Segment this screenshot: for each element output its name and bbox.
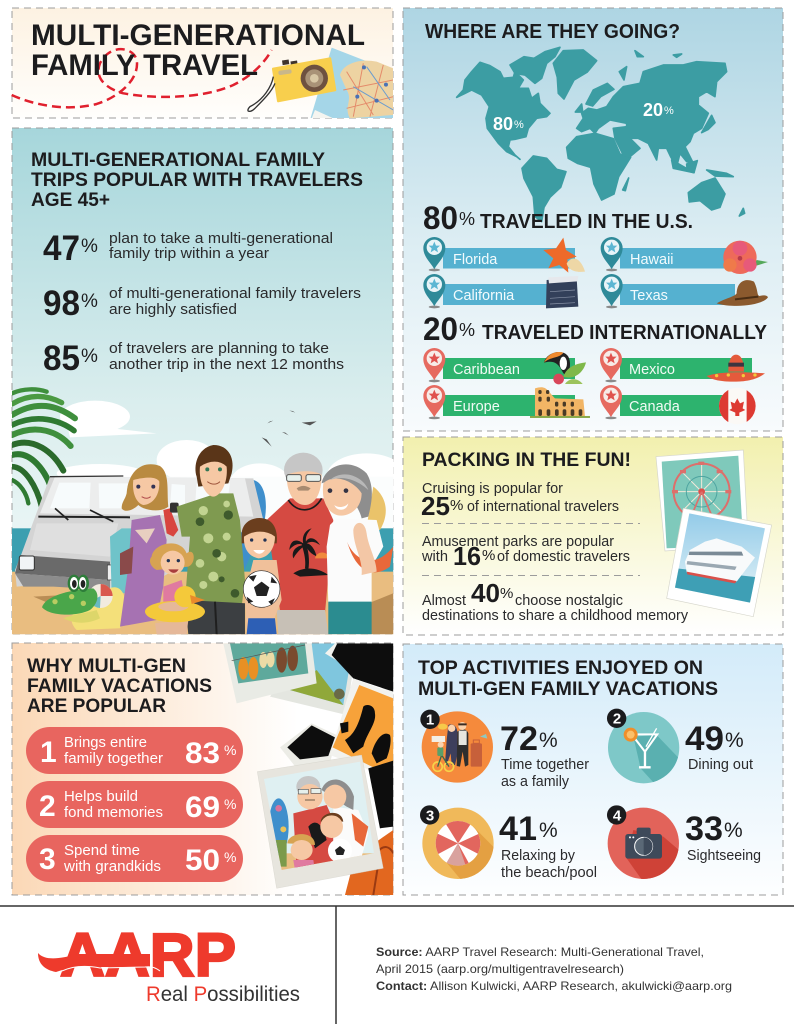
panel: multi-generational trips popular — [12, 128, 407, 635]
stat: 47% — [43, 229, 333, 268]
badge numbers: 4 — [613, 808, 622, 824]
U.S. destinations: Florida — [453, 252, 498, 268]
activity 3: 41%: the beach/pool — [501, 865, 597, 881]
U.S. destinations: Hawaii — [630, 252, 674, 268]
heading: 20% traveled internationally — [423, 311, 768, 347]
stat: amusement parks: of domestic travelers — [497, 549, 630, 565]
activity 2: 49%: % — [725, 729, 744, 752]
reason 1: Brings entire — [64, 735, 147, 751]
activity 3: 41% — [499, 810, 597, 881]
heading: WHERE ARE THEY GOING? — [425, 21, 680, 43]
activity 3: 41%: Relaxing by — [501, 848, 576, 864]
stat: cruising — [421, 481, 619, 521]
heading: AGE 45+ — [31, 190, 110, 211]
heading: MULTI-GENERATIONAL — [31, 19, 365, 52]
world map — [457, 47, 745, 222]
U.S. destinations: California — [453, 288, 515, 304]
source and contact: Source: AARP Travel Research: Multi-Generational Travel, — [376, 945, 704, 959]
reason 2: Helps build — [64, 789, 138, 805]
stat: 98%: are highly satisfied — [109, 302, 237, 318]
panel: why multi-gen family vacations are popular — [12, 643, 393, 895]
stat: nostalgic: 40 — [471, 578, 500, 608]
map labels — [493, 100, 674, 134]
source and contact: April 2015 (aarp.org/multigentravelresearch) — [376, 962, 624, 976]
stat: nostalgic — [422, 578, 689, 624]
stat: 85% — [43, 339, 344, 378]
reason 3: % — [224, 849, 236, 865]
stat: 47%: % — [81, 236, 98, 257]
stat: 85%: of travelers are planning to take — [109, 341, 329, 357]
heading: 20% traveled internationally: % — [459, 320, 475, 340]
scattered photos — [223, 643, 393, 895]
stat: nostalgic: destinations to share a childhood memory — [422, 608, 689, 624]
activity 3: 41%: 41 — [499, 810, 537, 848]
panel: where are they going — [403, 8, 783, 431]
activity 3: 41%: % — [539, 819, 558, 842]
reason 3: Spend time — [64, 843, 140, 859]
stat: 98%: % — [81, 291, 98, 312]
activity 1: 72%: % — [539, 729, 558, 752]
badge numbers: 1 — [426, 712, 434, 728]
activity 2: 49% — [685, 720, 753, 773]
stat: 98%: 98 — [43, 284, 80, 323]
map labels: % — [664, 105, 674, 117]
photos: ferris wheel and cruise ship — [656, 450, 773, 617]
stat: amusement parks: with — [421, 549, 448, 565]
pins and icons: international — [423, 348, 765, 425]
reason 2: % — [224, 796, 236, 812]
panel: title — [12, 8, 393, 120]
heading: FAMILY TRAVEL — [31, 49, 258, 82]
heading: 80% traveled in the U.S.: 80 — [423, 200, 458, 236]
panel: top activities — [403, 644, 783, 895]
tagline: Real Possibilities — [146, 983, 300, 1006]
reason 2: 69 — [185, 791, 220, 824]
U.S. destinations: Texas — [630, 288, 668, 304]
stat: 85%: % — [81, 346, 98, 367]
stat: 98% — [43, 284, 361, 323]
reason 2: fond memories — [64, 805, 163, 821]
heading: 20% traveled internationally: TRAVELED INTERNATIONALLY — [482, 322, 768, 344]
stat: nostalgic: % — [500, 585, 513, 602]
international destinations: Europe — [453, 399, 500, 415]
reason 1: 83 — [185, 737, 220, 770]
activity 1: 72% — [500, 720, 589, 790]
stat: 47%: 47 — [43, 229, 80, 268]
heading: MULTI-GEN FAMILY VACATIONS — [418, 679, 718, 700]
reason 1: family together — [64, 751, 163, 767]
AARP logo — [38, 921, 300, 1006]
badge numbers: 2 — [613, 710, 621, 728]
activity 4: 33% — [685, 810, 761, 864]
illustration: family at the beach — [12, 389, 407, 635]
badge numbers — [426, 710, 622, 824]
badge numbers: 3 — [426, 808, 434, 824]
activity 4: 33%: 33 — [685, 810, 723, 848]
stat: amusement parks: 16 — [453, 541, 481, 571]
reason 3: 50 — [185, 844, 220, 877]
reason 3: 3 — [39, 843, 56, 876]
heading: WHY MULTI-GEN — [27, 656, 186, 677]
activity 4: 33%: % — [724, 819, 743, 842]
heading: 80% traveled in the U.S.: % — [459, 209, 475, 229]
reason 2 — [26, 781, 243, 828]
dashed route — [12, 49, 272, 107]
reason 3 — [26, 835, 243, 882]
stat: cruising: Cruising is popular for — [422, 481, 563, 497]
international destinations: Mexico — [629, 362, 675, 378]
stat: nostalgic: choose nostalgic — [515, 593, 623, 609]
heading: PACKING IN THE FUN! — [422, 449, 631, 471]
reason 1 — [26, 727, 243, 774]
U.S. destinations — [423, 237, 768, 308]
stat: amusement parks: Amusement parks are popular — [422, 534, 614, 550]
international destinations: Canada — [629, 399, 681, 415]
stat: cruising: % — [450, 497, 463, 514]
stat: 85%: another trip in the next 12 months — [109, 357, 344, 373]
illustration: map and camera — [248, 48, 393, 120]
activity 1: 72%: Time together — [501, 757, 589, 773]
stat: cruising: of international travelers — [467, 499, 619, 515]
heading: 80% traveled in the U.S. — [423, 200, 693, 236]
stat: 85%: 85 — [43, 339, 80, 378]
AARP logo: AARP — [60, 921, 236, 989]
stat: nostalgic: Almost — [422, 593, 466, 609]
map labels: % — [514, 119, 524, 131]
heading: FAMILY VACATIONS — [27, 676, 212, 697]
map labels: 80 — [493, 114, 513, 134]
source and contact: Contact: Allison Kulwicki, AARP Research, akulwicki@aarp.org — [376, 979, 732, 993]
map labels: 20 — [643, 100, 663, 120]
panel: packing in the fun — [403, 437, 783, 635]
stat: amusement parks — [421, 534, 630, 571]
stat: cruising: 25 — [421, 491, 450, 521]
heading: 80% traveled in the U.S.: TRAVELED IN THE U.S. — [480, 211, 693, 233]
activity icons — [420, 709, 693, 887]
reason 3: with grandkids — [63, 859, 161, 875]
reason 2: 2 — [39, 790, 56, 823]
stat: 47%: family trip within a year — [109, 246, 269, 262]
international destinations: Caribbean — [453, 362, 520, 378]
stat: 98%: of multi-generational family travelers — [109, 286, 361, 302]
activity 4: 33%: Sightseeing — [687, 848, 761, 864]
activity 1: 72%: as a family — [501, 774, 570, 790]
heading: TRIPS POPULAR WITH TRAVELERS — [31, 170, 363, 191]
heading: TOP ACTIVITIES ENJOYED ON — [418, 658, 703, 679]
reason 1: 1 — [40, 736, 57, 769]
international destinations — [423, 348, 765, 425]
heading: MULTI-GENERATIONAL FAMILY — [31, 150, 325, 171]
stat: amusement parks: % — [482, 547, 495, 564]
activity 2: 49%: Dining out — [688, 757, 753, 773]
stat: 47%: plan to take a multi-generational — [109, 231, 333, 247]
activity 1: 72%: 72 — [500, 720, 538, 758]
activity 2: 49%: 49 — [685, 720, 724, 758]
heading: ARE POPULAR — [27, 696, 166, 717]
reason 1: % — [224, 742, 236, 758]
pins and icons: U.S. — [423, 237, 768, 308]
source and contact — [376, 945, 732, 993]
heading: 20% traveled internationally: 20 — [423, 311, 458, 347]
